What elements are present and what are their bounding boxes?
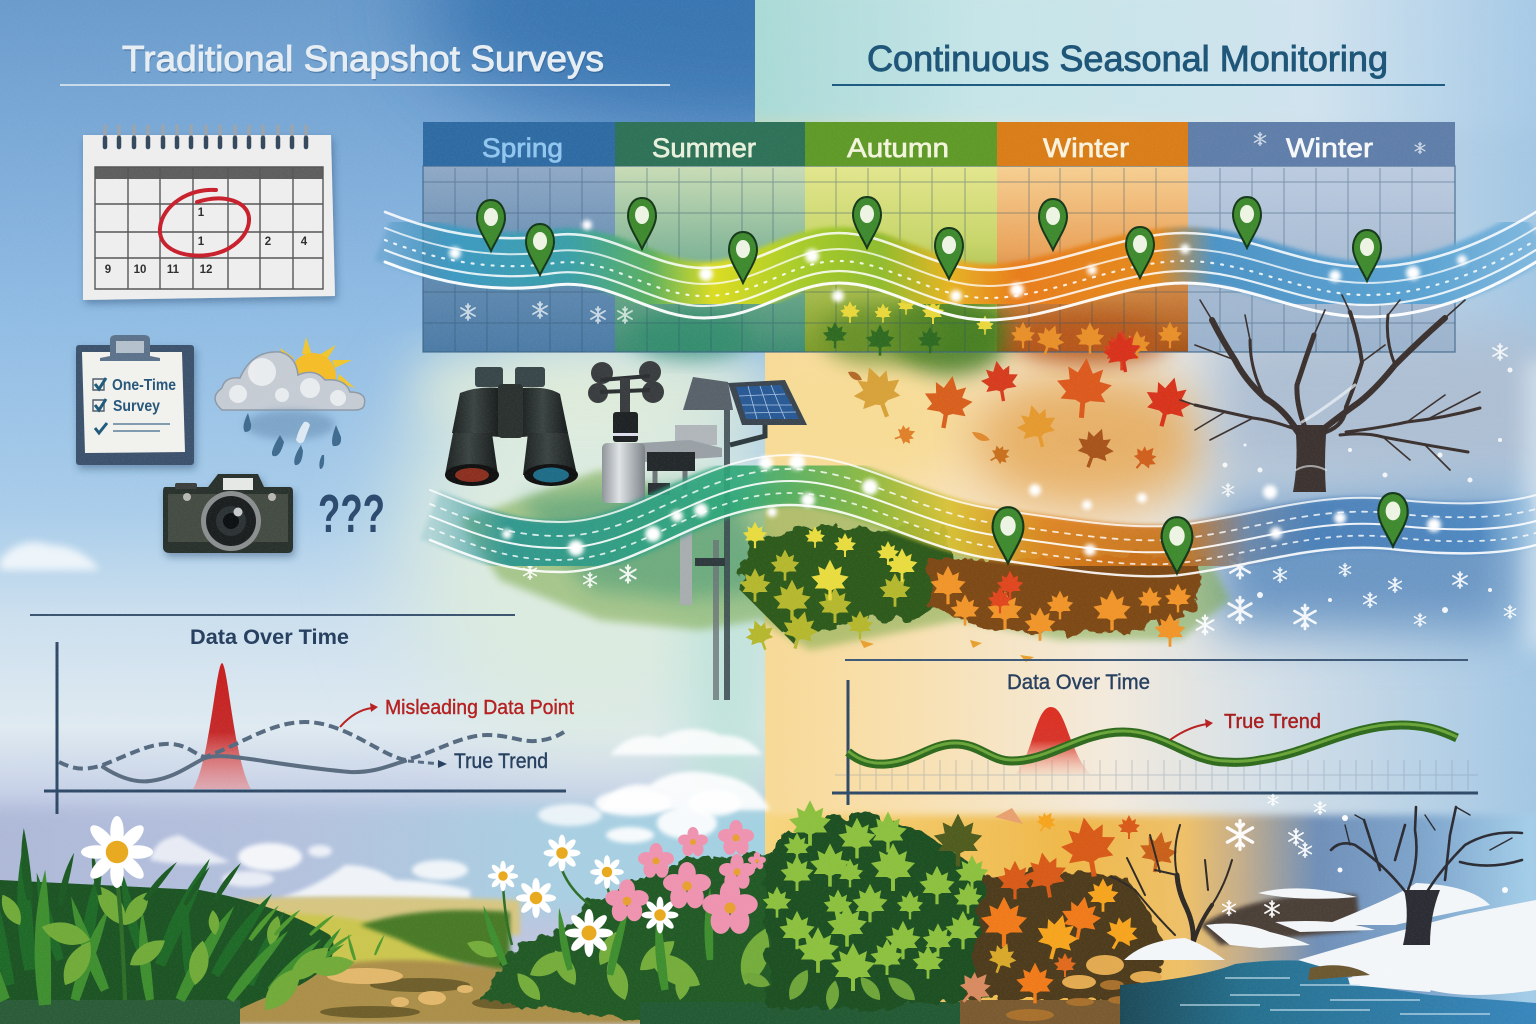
icon: binoculars (445, 367, 578, 486)
icon: camera (163, 474, 293, 553)
icon: calendar with circled date: 1 (198, 236, 205, 248)
icon: bare winter tree (1180, 295, 1480, 492)
icon: calendar with circled date: 1 (198, 207, 205, 219)
chart: left Data Over Time (30, 615, 574, 814)
red bump (1016, 707, 1090, 774)
red arrow (1170, 724, 1207, 740)
header: Winter (blue) (1188, 122, 1455, 166)
landscape: seasonal ground strip (0, 794, 1536, 1024)
location pins on upper ribbon (477, 197, 1381, 283)
label: Misleading Data Point: Misleading Data Point (385, 697, 574, 719)
header: Spring (423, 122, 615, 166)
lower ribbon foliage backdrop (460, 470, 1516, 662)
icon: one-time survey clipboard: One-Time (112, 377, 176, 394)
yellow meadow (225, 913, 470, 1000)
spiral binding (105, 126, 306, 147)
icon: weather station (588, 361, 807, 700)
snow banks (1124, 883, 1536, 995)
icon: calendar with circled date: 4 (301, 236, 308, 248)
title: Continuous Seasonal Monitoring: Continuous Seasonal Monitoring (867, 38, 1388, 79)
icon: one-time survey clipboard (76, 335, 194, 465)
header: Winter (blue): Winter (1286, 133, 1373, 163)
header: Winter (orange): Winter (1043, 133, 1129, 163)
header: Summer: Summer (652, 133, 756, 163)
icon: calendar with circled date: 12 (200, 264, 212, 276)
upper seasonal data ribbon (385, 212, 1536, 320)
far shrub line (360, 910, 510, 975)
misleading dashed line (59, 722, 564, 769)
green bush (740, 800, 1000, 1011)
autumn leaves falling (846, 329, 1197, 476)
header: Autumn: Autumn (847, 133, 949, 163)
table body columns (423, 166, 1455, 375)
dirt path (200, 960, 660, 1024)
icon: calendar with circled date: 11 (167, 264, 180, 276)
chart title: Data Over Time (190, 626, 349, 649)
question marks: ??? (318, 484, 385, 544)
dark far bank (1200, 894, 1360, 945)
header: Spring: Spring (482, 133, 563, 163)
icon: one-time survey clipboard: Survey (113, 398, 160, 415)
sensor body (602, 425, 722, 503)
icon: calendar with circled date (83, 126, 335, 300)
solar panel (683, 377, 807, 425)
anemometer (588, 361, 664, 442)
label: True Trend: True Trend (1224, 711, 1321, 733)
axes (44, 642, 566, 814)
bare tree (1331, 807, 1522, 945)
location pins on lower ribbon (993, 493, 1408, 573)
axes (832, 680, 1478, 805)
red hand-drawn circle (160, 190, 249, 256)
background: right seasonal panel (740, 0, 1536, 1024)
title: Traditional Snapshot Surveys (60, 38, 670, 85)
flower meadow (465, 820, 970, 1024)
faint grid (835, 760, 1478, 790)
left grass (0, 828, 385, 1024)
snow sparkles around tree (1222, 344, 1512, 496)
station poles (680, 410, 765, 700)
icon: calendar with circled date: 10 (134, 264, 146, 276)
winter snowflakes (1223, 794, 1508, 917)
red arrow (340, 708, 372, 727)
panel: seasonal calendar table (423, 122, 1455, 375)
chart title: Data Over Time (1007, 671, 1150, 694)
shoreline rocks (1308, 965, 1370, 980)
title: Traditional Snapshot Surveys: Traditional Snapshot Surveys (122, 38, 604, 79)
chart: right Data Over Time (832, 660, 1478, 805)
big daisy (81, 816, 153, 888)
label: True Trend: True Trend (454, 750, 548, 773)
lower seasonal data ribbon (430, 454, 1536, 576)
river (1120, 960, 1536, 1024)
distant pale field (225, 896, 520, 935)
header: Summer (615, 122, 805, 166)
icon: calendar with circled date: 9 (105, 264, 111, 276)
title: Traditional Snapshot Surveys: Traditional Snapshot Surveys (123, 40, 605, 81)
true trend arrow (408, 761, 440, 764)
true trend line (103, 756, 405, 781)
red spike (193, 663, 251, 789)
illustration: flowers and leaves below upper ribbon (461, 295, 1182, 370)
river reflections (1180, 978, 1490, 1014)
autumn leaf bank (951, 808, 1180, 1024)
header: Autumn (805, 122, 997, 166)
small autumn tree (1111, 825, 1232, 945)
background: left sky panel (0, 0, 765, 1024)
header: Winter (orange) (997, 122, 1188, 166)
clouds: lower sky (0, 542, 770, 900)
green true trend line (848, 724, 1457, 764)
icon: sun, cloud and rain (215, 337, 365, 469)
icon: calendar with circled date: 2 (265, 236, 271, 248)
